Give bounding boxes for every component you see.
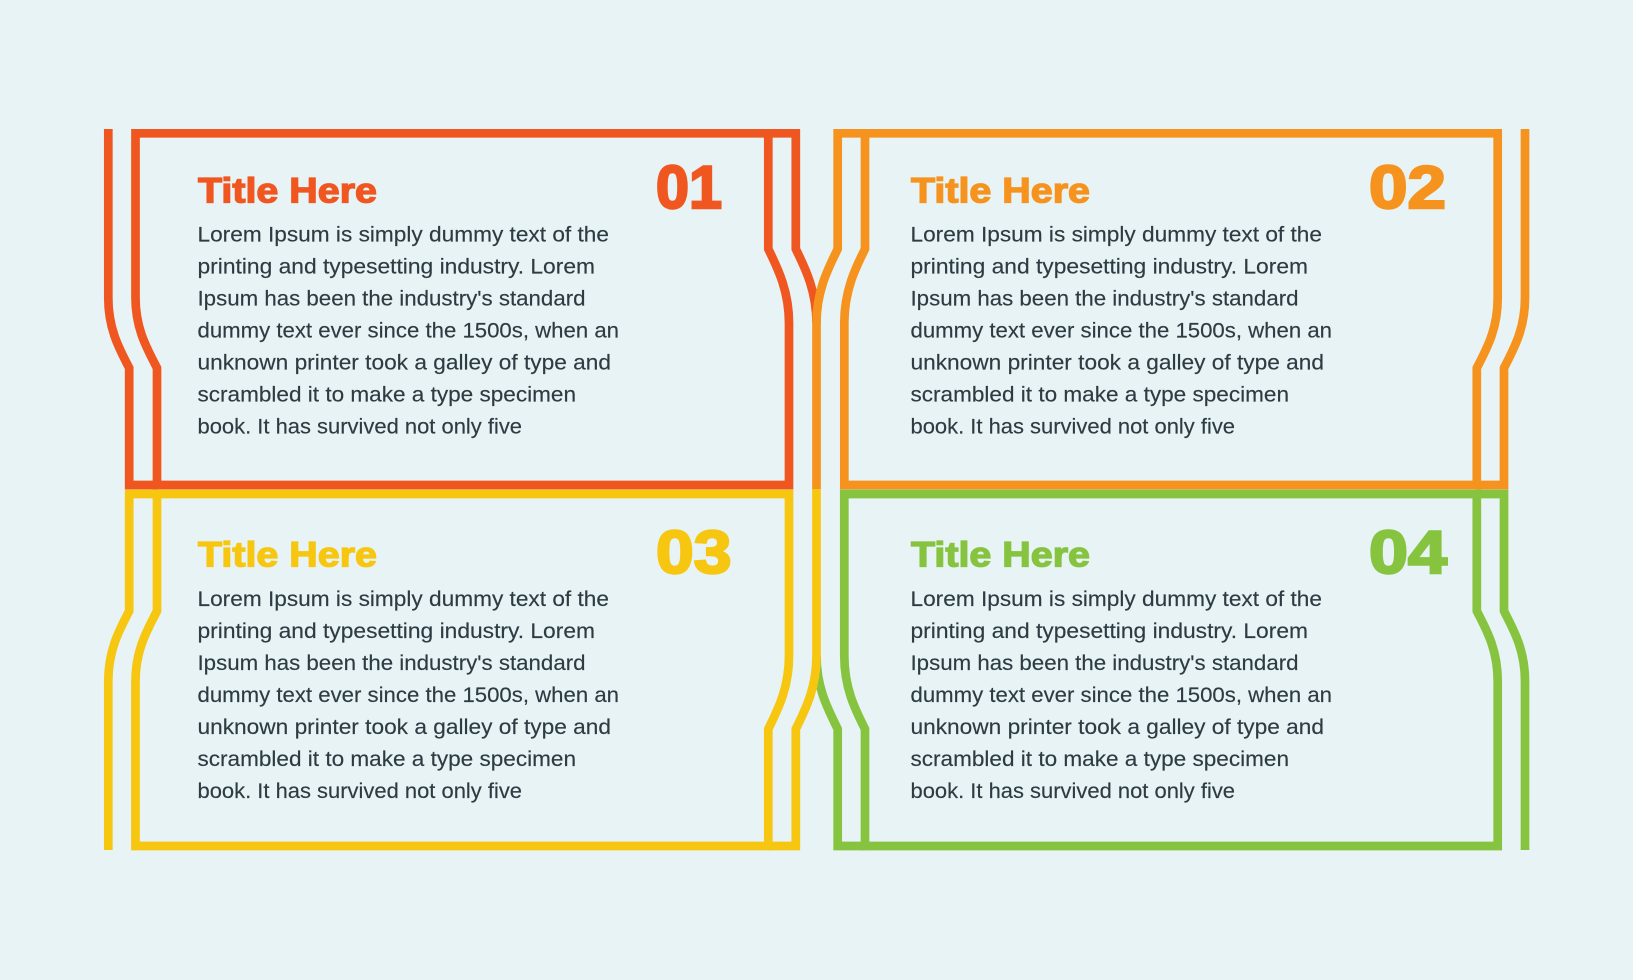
body text 02: scrambled it to make a type specimen — [910, 384, 1289, 407]
yellow frame lines — [108, 489, 817, 850]
number 01: 01 — [656, 154, 722, 221]
panel 01: red — [108, 129, 817, 485]
body text 01 — [198, 224, 619, 439]
body text 01: dummy text ever since the 1500s, when an — [198, 320, 619, 343]
body text 03 — [198, 588, 619, 803]
title 04: Title Here — [911, 536, 1090, 575]
red frame lines — [108, 129, 817, 485]
body text 03: book. It has survived not only five — [198, 780, 522, 803]
body text 03: dummy text ever since the 1500s, when an — [198, 684, 619, 707]
body text 04 — [910, 588, 1332, 803]
green frame lines — [816, 494, 1525, 850]
body text 02: Ipsum has been the industry's standard — [910, 288, 1298, 311]
title 02: Title Here — [911, 172, 1090, 210]
body text 04: dummy text ever since the 1500s, when an — [910, 684, 1332, 707]
orange frame lines — [816, 129, 1525, 489]
body text 04: Ipsum has been the industry's standard — [910, 652, 1298, 675]
number 03: 03 — [656, 519, 732, 586]
body text 04: Lorem Ipsum is simply dummy text of the — [910, 588, 1322, 611]
title 01: Title Here — [198, 172, 377, 210]
body text 04: book. It has survived not only five — [910, 780, 1235, 803]
panel 04: green — [816, 494, 1525, 850]
body text 03: printing and typesetting industry. Lorem — [198, 620, 595, 643]
body text 04: printing and typesetting industry. Lorem — [910, 620, 1308, 643]
body text 03: scrambled it to make a type specimen — [198, 748, 576, 771]
body text 04: unknown printer took a galley of type and — [910, 716, 1324, 739]
body text 02: Lorem Ipsum is simply dummy text of the — [910, 224, 1322, 247]
body text 02 — [910, 224, 1332, 439]
body text 03: Ipsum has been the industry's standard — [198, 652, 586, 675]
body text 01: book. It has survived not only five — [198, 416, 522, 439]
body text 01: scrambled it to make a type specimen — [198, 384, 576, 407]
title 03: Title Here — [198, 536, 377, 575]
body text 01: Ipsum has been the industry's standard — [198, 288, 586, 311]
body text 03: unknown printer took a galley of type and — [198, 716, 611, 739]
body text 02: printing and typesetting industry. Lorem — [910, 256, 1308, 279]
number 04: 04 — [1369, 519, 1448, 586]
body text 02: unknown printer took a galley of type and — [910, 352, 1324, 375]
number 02: 02 — [1369, 154, 1446, 221]
body text 02: dummy text ever since the 1500s, when an — [910, 320, 1332, 343]
body text 01: Lorem Ipsum is simply dummy text of the — [198, 224, 609, 247]
panel 02: orange — [816, 129, 1525, 489]
body text 03: Lorem Ipsum is simply dummy text of the — [198, 588, 609, 611]
panel 03: yellow — [108, 489, 817, 850]
body text 02: book. It has survived not only five — [910, 416, 1235, 439]
body text 01: printing and typesetting industry. Lorem — [198, 256, 595, 279]
body text 04: scrambled it to make a type specimen — [910, 748, 1289, 771]
body text 01: unknown printer took a galley of type and — [198, 352, 611, 375]
